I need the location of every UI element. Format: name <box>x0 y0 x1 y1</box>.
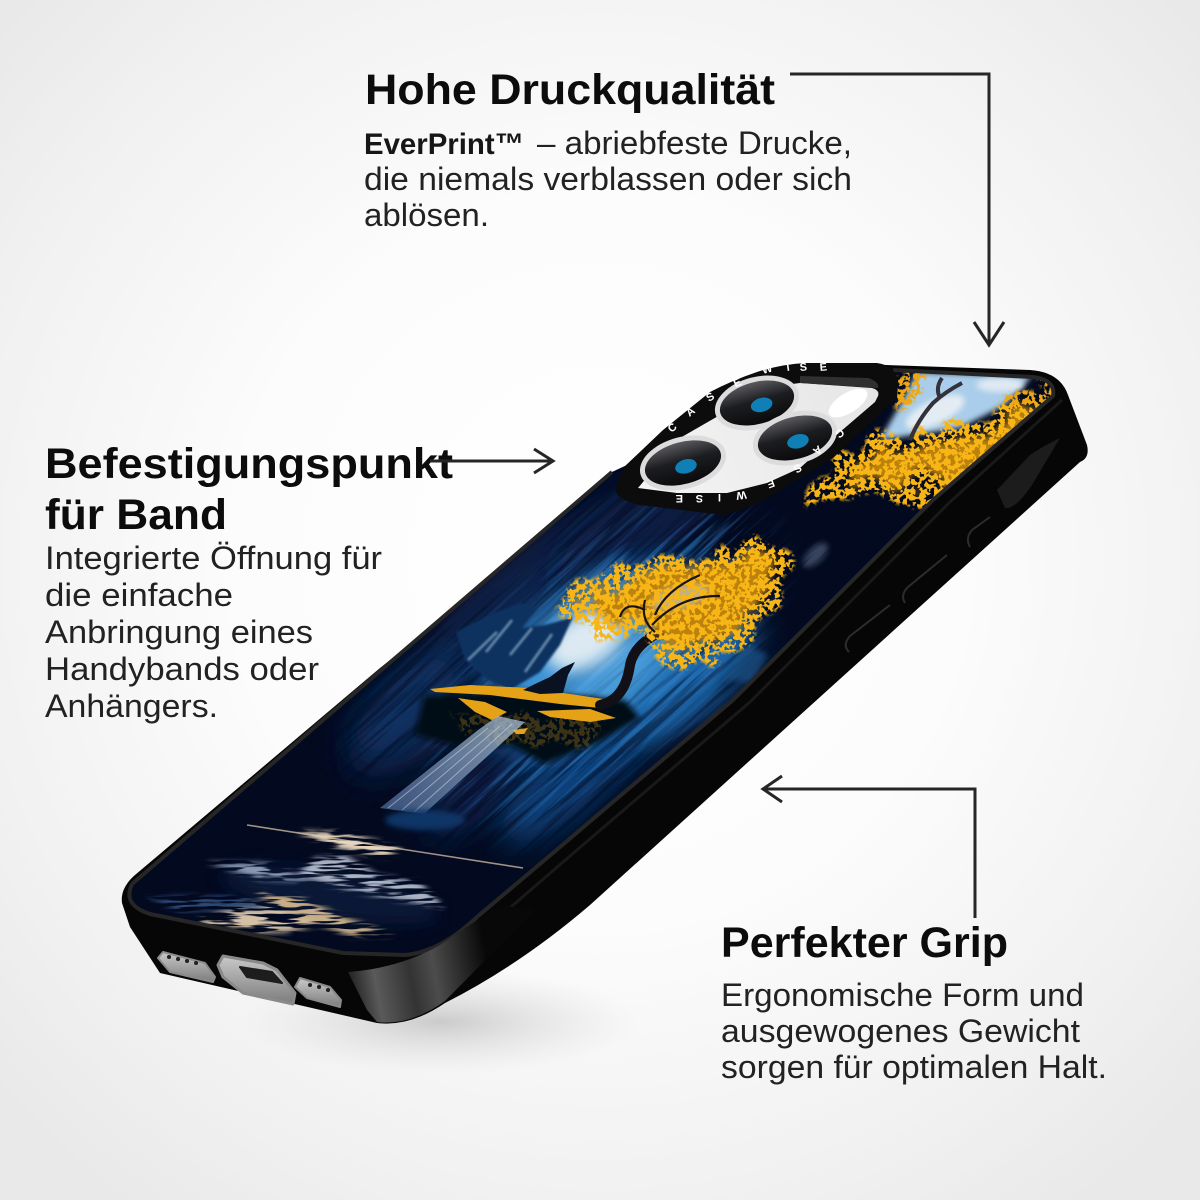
cliff rock <box>415 690 640 764</box>
glossy corner <box>348 905 535 1023</box>
volume down <box>846 605 890 652</box>
arrow <box>790 74 1004 345</box>
volume up <box>903 555 947 603</box>
text block: Ergonomische Form und <box>721 977 1084 1013</box>
heading: Befestigungspunkt <box>45 440 453 488</box>
text block <box>364 125 852 233</box>
back artwork <box>132 369 1052 953</box>
flash <box>824 383 872 423</box>
text block <box>45 540 382 724</box>
phone shadow <box>240 970 640 1074</box>
heading: für Band <box>45 491 227 539</box>
side mute switch <box>997 438 1060 508</box>
text block: die niemals verblassen oder sich <box>364 161 852 197</box>
lens left <box>634 426 732 500</box>
gold scatter on rock <box>440 712 610 745</box>
text block: – abriebfeste Drucke, <box>537 125 852 161</box>
text block: die einfache <box>45 577 233 613</box>
phone case <box>122 363 1088 1024</box>
text block: Anbringung eines <box>45 614 313 650</box>
text block <box>721 977 1107 1085</box>
lens right <box>747 402 843 474</box>
heading <box>45 440 453 539</box>
recess shading <box>800 376 878 388</box>
text block: ablösen. <box>364 197 489 233</box>
heading: Perfekter Grip <box>721 919 1008 967</box>
case body <box>122 363 1088 1024</box>
text block: Handybands oder <box>45 651 319 687</box>
waterfall <box>380 716 525 814</box>
brand top: CASEWISE <box>666 361 828 435</box>
text block: Integrierte Öffnung für <box>45 540 382 576</box>
painterly brush strokes <box>343 466 828 852</box>
camera window <box>638 383 878 493</box>
right speaker <box>295 978 341 1007</box>
side button <box>968 517 990 547</box>
text block: EverPrint™ <box>364 128 524 161</box>
callout: grip <box>721 776 1107 1085</box>
water reflections <box>145 810 523 936</box>
heading: Hohe Druckqualität <box>365 66 775 114</box>
golden ledges <box>430 685 616 734</box>
bright sky behind tree <box>480 560 686 704</box>
callout: print quality <box>364 66 1004 345</box>
rim <box>129 370 1053 955</box>
camera bump <box>616 361 898 515</box>
mountains <box>456 603 768 690</box>
callout: strap point <box>45 440 553 724</box>
meditating figure <box>523 662 575 694</box>
upper sky <box>880 372 1032 440</box>
text block: Anhängers. <box>45 688 218 724</box>
text block: ausgewogenes Gewicht <box>721 1013 1080 1049</box>
brand bottom: CASEWISE <box>676 426 846 504</box>
lower tree <box>556 547 790 705</box>
lens top <box>709 367 805 439</box>
text block: sorgen für optimalen Halt. <box>721 1049 1107 1085</box>
left speaker <box>158 952 215 982</box>
upper tree <box>803 368 1058 505</box>
arrow <box>430 449 553 473</box>
arrow <box>763 776 975 918</box>
usb port <box>218 956 295 1004</box>
